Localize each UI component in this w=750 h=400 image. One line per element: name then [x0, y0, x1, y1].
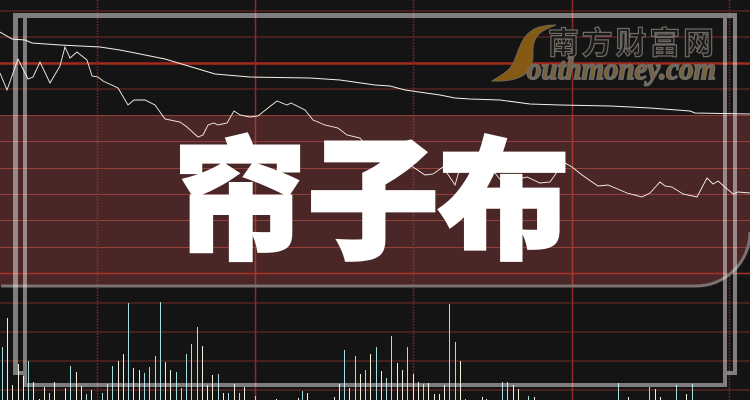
title — [174, 129, 570, 276]
price line: intraday — [0, 47, 750, 197]
logo domain: outhmoney.com — [527, 51, 716, 86]
title: 布 — [438, 129, 570, 276]
logo: southmoney — [492, 25, 716, 86]
chart: volume bars — [2, 302, 692, 400]
price line: moving average — [0, 32, 750, 114]
logo chinese name: 南方财富网 — [548, 26, 714, 61]
panel: title band — [0, 115, 750, 286]
title: 子 — [307, 129, 439, 276]
title: 帘 — [174, 129, 306, 276]
logo swoosh — [492, 25, 556, 81]
